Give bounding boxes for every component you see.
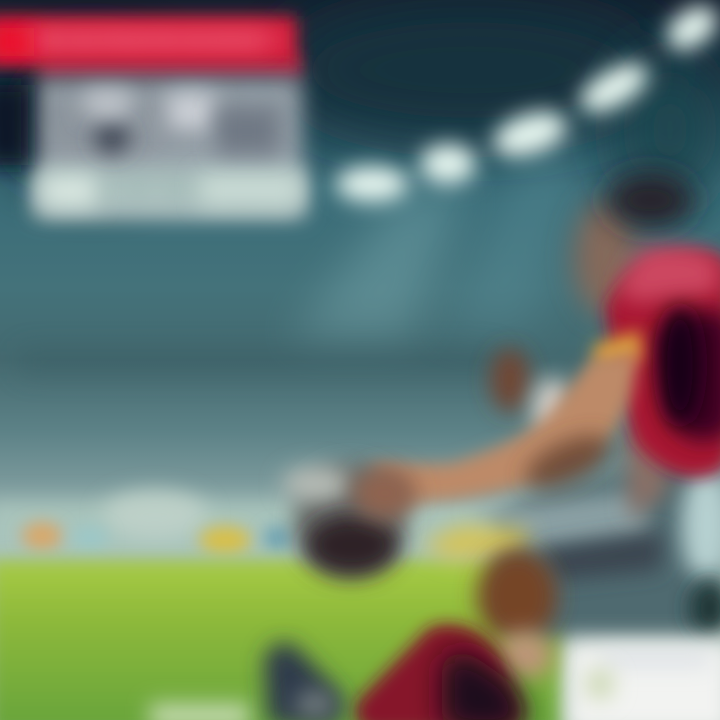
red banner: THE ULTIMATE GUIDE TO bbox=[20, 28, 290, 53]
pitch bbox=[15, 585, 540, 710]
title lines: SPORTS bbox=[39, 88, 297, 162]
jersey shadow bbox=[682, 335, 708, 416]
hair bbox=[606, 172, 694, 228]
crowd and advertising boards bbox=[15, 491, 505, 554]
arm bbox=[372, 352, 635, 505]
rear thigh bbox=[625, 420, 670, 520]
head bbox=[574, 200, 638, 316]
background figure bbox=[490, 348, 530, 412]
yellow advertising board bbox=[420, 525, 530, 560]
player figure bbox=[282, 172, 720, 626]
title lines bbox=[37, 88, 299, 224]
red jersey bbox=[628, 275, 708, 454]
knee and lower leg bbox=[276, 550, 557, 718]
title lines: BETTING bbox=[37, 164, 299, 224]
shorts and lower body bbox=[530, 490, 690, 610]
white corner logo panel bbox=[150, 652, 710, 716]
stadium floodlights bbox=[336, 0, 720, 202]
armband bbox=[592, 330, 642, 374]
red banner bbox=[5, 28, 302, 79]
title panel bbox=[6, 78, 304, 224]
boot bbox=[276, 655, 332, 714]
ball bbox=[294, 464, 406, 576]
hand bbox=[353, 467, 417, 519]
